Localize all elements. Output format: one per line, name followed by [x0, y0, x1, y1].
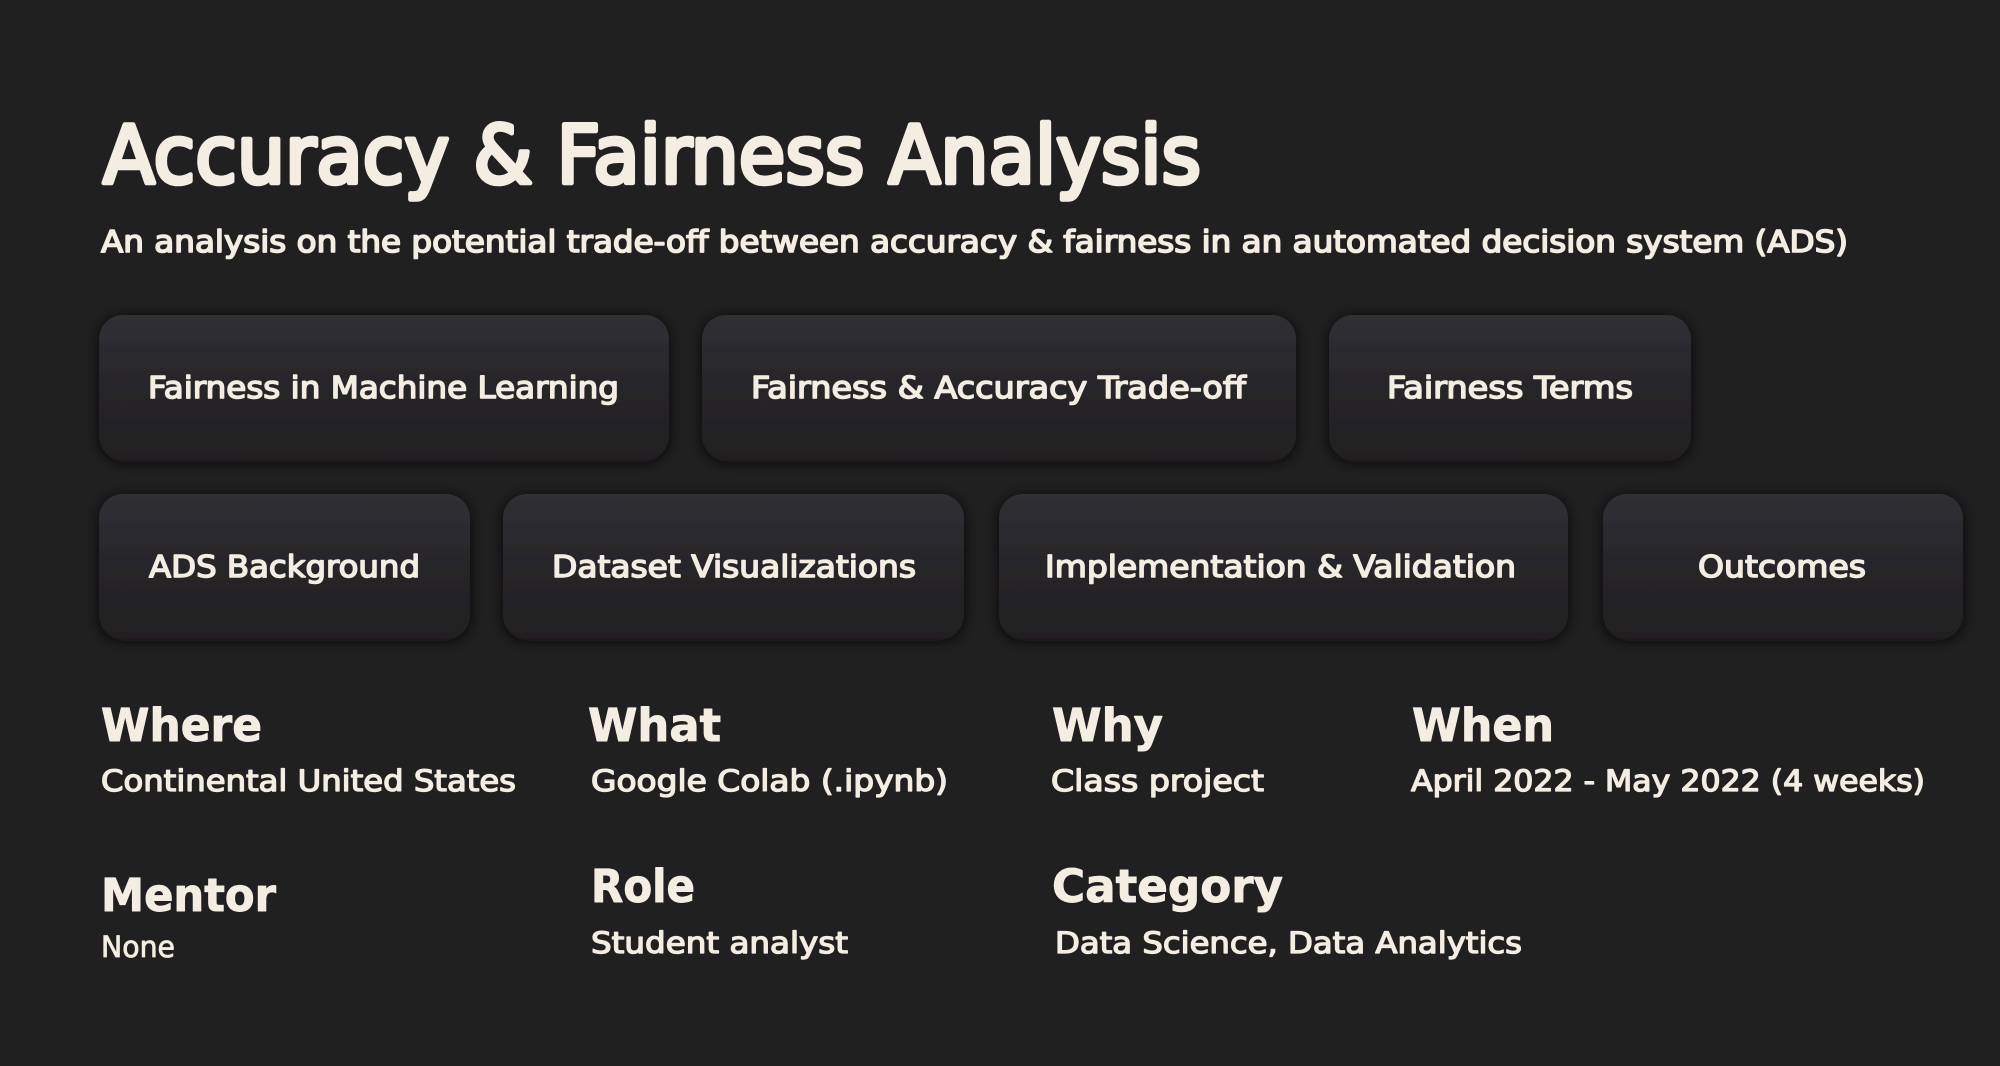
title: Accuracy & Fairness Analysis	[103, 109, 1201, 202]
button: Fairness Terms: Fairness Terms	[1387, 371, 1633, 406]
info: Category: Category	[1052, 860, 1283, 913]
info: Where: Continental United States	[101, 764, 516, 798]
info: Mentor	[101, 869, 277, 964]
info: When: When	[1412, 699, 1554, 752]
info: Role: Student analyst	[591, 926, 848, 960]
info: What: Google Colab (.ipynb)	[591, 764, 948, 798]
button: ADS Background: ADS Background	[149, 550, 420, 585]
button: Implementation & Validation	[999, 494, 1568, 639]
button: Outcomes	[1603, 494, 1963, 639]
info: When: April 2022 - May 2022 (4 weeks)	[1411, 764, 1925, 798]
info: Mentor: None	[101, 930, 175, 964]
info: Role: Role	[591, 860, 695, 913]
info: What: What	[588, 699, 721, 752]
info: Role	[591, 860, 848, 960]
info: When	[1411, 699, 1925, 798]
info: Why: Why	[1052, 699, 1163, 752]
button: Dataset Visualizations	[503, 494, 964, 639]
info: Why	[1051, 699, 1264, 798]
info: Where: Where	[101, 699, 262, 752]
info: Category: Data Science, Data Analytics	[1055, 926, 1522, 960]
info: Mentor: Mentor	[101, 869, 277, 922]
button: Fairness & Accuracy Trade-off	[702, 315, 1296, 460]
button: Fairness in Machine Learning: Fairness in Machine Learning	[148, 371, 619, 406]
info: Category	[1052, 860, 1522, 960]
button: Fairness & Accuracy Trade-off: Fairness & Accuracy Trade-off	[751, 371, 1247, 406]
info: What	[588, 699, 948, 798]
button: Dataset Visualizations: Dataset Visualizations	[552, 550, 916, 585]
info: Where	[101, 699, 516, 798]
button: Fairness Terms	[1329, 315, 1691, 460]
button: Implementation & Validation: Implementation & Validation	[1045, 550, 1516, 585]
button: ADS Background	[99, 494, 470, 639]
button: Fairness in Machine Learning	[99, 315, 669, 460]
button: Outcomes: Outcomes	[1698, 550, 1866, 585]
info: Why: Class project	[1051, 764, 1264, 798]
subtitle: An analysis on the potential trade-off between accuracy & fairness in an automated decision system (ADS)	[101, 225, 1848, 260]
